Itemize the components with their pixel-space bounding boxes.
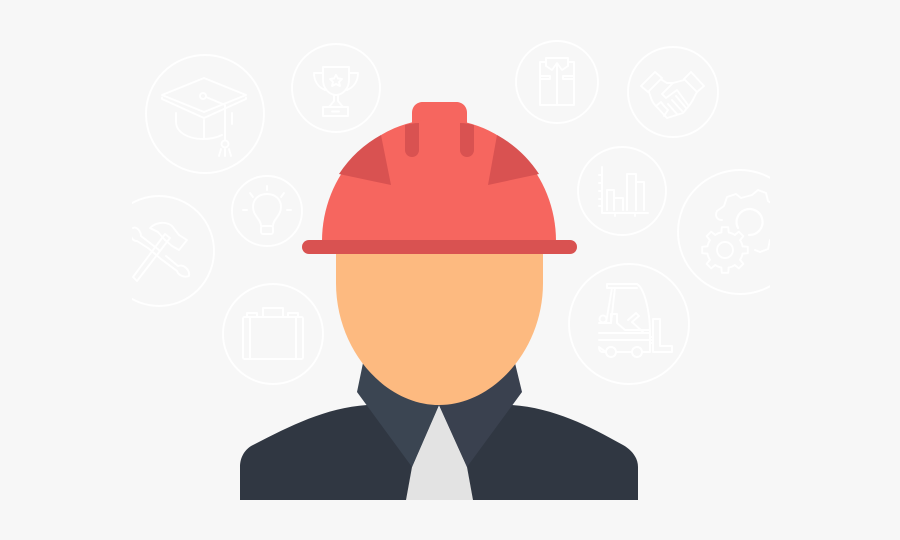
right vent slot: [460, 123, 474, 157]
collar: left: [357, 363, 439, 467]
right side panel: [488, 135, 539, 185]
left side panel: [339, 135, 391, 185]
background icons: [104, 41, 802, 384]
illustration: worker surrounded by career icons: [240, 102, 638, 500]
worker figure: [240, 102, 638, 500]
helmet top ridge: [412, 102, 467, 130]
face: [336, 250, 543, 405]
icon: shirt: [516, 41, 598, 123]
helmet brim: [302, 240, 577, 254]
icon: trophy: [292, 44, 380, 132]
icon: briefcase: [223, 284, 323, 384]
hard hat: [302, 102, 577, 254]
shirt: [406, 405, 473, 500]
collar: right: [439, 363, 522, 467]
icon: gears: [678, 170, 802, 294]
icon: graduation cap: [146, 55, 264, 173]
icon: light bulb: [232, 176, 302, 246]
left vent slot: [405, 123, 419, 157]
icon: hammer and wrench: [104, 196, 214, 306]
helmet dome: [322, 119, 556, 241]
icon: bar chart: [578, 147, 666, 235]
suit jacket: [240, 405, 638, 500]
icon: handshake: [628, 47, 718, 137]
icon: forklift: [569, 264, 689, 384]
